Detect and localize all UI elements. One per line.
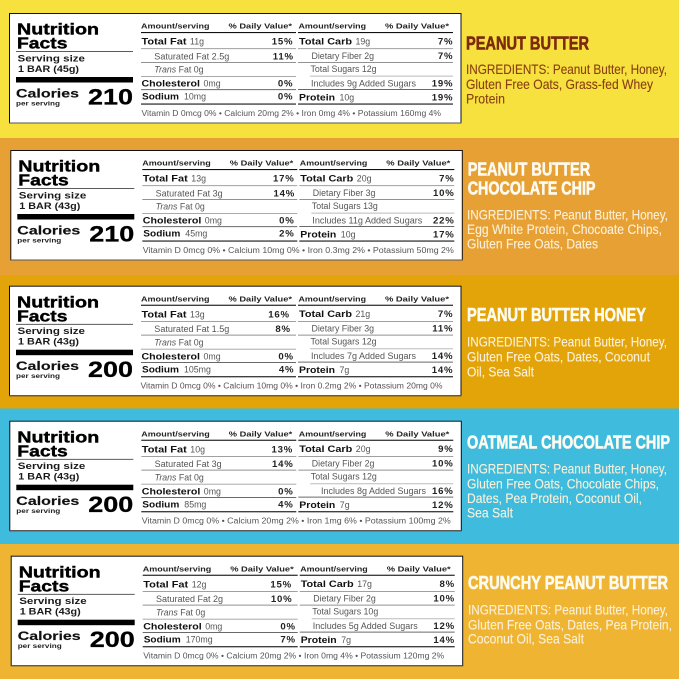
table: fat, cholesterol, sodium: 13g — [191, 174, 206, 184]
serving size: Serving size — [18, 326, 85, 336]
table: fat, cholesterol, sodium: Saturated Fat 2.5g — [154, 51, 229, 61]
table: fat, cholesterol, sodium: 16% — [268, 309, 290, 320]
table: fat, cholesterol, sodium: 7% — [280, 634, 296, 645]
table: fat, cholesterol, sodium: 0mg — [205, 216, 222, 226]
ingredients: Peanut Butter — [466, 61, 667, 106]
ingredients: Oatmeal Chocolate Chip: Dates, Pea Protein, Coconut Oil, — [467, 490, 642, 506]
table: fat, cholesterol, sodium: 4% — [279, 364, 294, 375]
table: carbs, sugars, protein: Dietary Fiber 2g — [312, 51, 374, 61]
table: fat, cholesterol, sodium: 14% — [273, 188, 295, 199]
calories: Calories — [16, 86, 79, 100]
flavor heading: Peanut Butter Chocolate Chip — [468, 159, 596, 198]
table: carbs, sugars, protein: Protein — [299, 500, 335, 510]
ingredients: Peanut Butter Honey — [467, 334, 667, 379]
calories — [18, 627, 135, 652]
table: fat, cholesterol, sodium: Saturated Fat 3g — [155, 459, 222, 469]
table: fat, cholesterol, sodium: Sodium — [144, 634, 181, 644]
heading: Nutrition Facts: Facts — [17, 443, 68, 460]
table: fat, cholesterol, sodium: Trans Fat 0g — [154, 337, 204, 347]
calories — [16, 492, 133, 517]
table: fat, cholesterol, sodium — [141, 429, 296, 512]
serving size: 1 BAR (45g) — [18, 64, 79, 74]
table: fat, cholesterol, sodium: 0% — [280, 621, 296, 632]
panel: oatmeal chocolate chip nutrition facts — [9, 421, 462, 531]
table: fat, cholesterol, sodium: 10g — [190, 444, 205, 454]
table: carbs, sugars, protein: Protein — [299, 365, 335, 375]
heading: Nutrition Facts: Nutrition — [19, 564, 101, 581]
heading: Nutrition Facts: Facts — [19, 578, 69, 595]
table: fat, cholesterol, sodium: 8% — [275, 324, 291, 335]
table: carbs, sugars, protein — [298, 22, 453, 105]
table: fat, cholesterol, sodium: 0mg — [204, 79, 221, 89]
table: carbs, sugars, protein: Dietary Fiber 2g — [312, 459, 374, 469]
table: fat, cholesterol, sodium: Total Fat — [142, 444, 187, 454]
table: carbs, sugars, protein: Includes 9g Added Sugars — [311, 78, 417, 88]
table: carbs, sugars, protein: Amount/serving — [298, 22, 366, 31]
table: carbs, sugars, protein: 19% — [432, 92, 453, 103]
table: carbs, sugars, protein: Amount/serving — [300, 564, 368, 573]
table: fat, cholesterol, sodium: 0mg — [205, 621, 222, 631]
calories: per serving — [16, 102, 60, 108]
table: fat, cholesterol, sodium: 2% — [279, 229, 295, 240]
table: fat, cholesterol, sodium: 10% — [271, 594, 293, 605]
table: carbs, sugars, protein: 7% — [438, 36, 453, 47]
serving size: Serving size — [18, 54, 85, 64]
serving size — [17, 188, 134, 220]
calories — [16, 357, 133, 382]
serving size: 1 BAR (43g) — [18, 472, 79, 482]
table: carbs, sugars, protein: 7% — [438, 309, 453, 320]
heading: Nutrition Facts: Facts — [17, 308, 68, 325]
calories — [17, 222, 134, 246]
ingredients: Crunchy Peanut Butter: Coconut Oil, Sea Salt — [468, 630, 584, 646]
table: carbs, sugars, protein: 14% — [432, 365, 453, 376]
ingredients: Peanut Butter: Protein — [466, 90, 505, 106]
table: carbs, sugars, protein: 7% — [438, 51, 453, 62]
table: fat, cholesterol, sodium: Cholesterol — [143, 216, 201, 226]
flavor heading: Peanut Butter Chocolate Chip: CHOCOLATE CHIP — [468, 177, 596, 198]
table: carbs, sugars, protein: Protein — [300, 229, 336, 239]
flavor heading: Peanut Butter: PEANUT BUTTER — [466, 32, 589, 53]
serving size: 1 BAR (43g) — [19, 201, 80, 211]
heading: Nutrition Facts: Nutrition — [17, 429, 99, 446]
calories: Calories — [18, 629, 81, 643]
calories: Calories — [16, 494, 80, 508]
vitamins and minerals line: Vitamin D 0mcg 0% • Calcium 10mg 0% • Iron 0.2mg 2% • Potassium 20mg 0% — [140, 382, 442, 391]
ingredients: Peanut Butter Chocolate Chip — [467, 206, 668, 251]
ingredients: Peanut Butter: Gluten Free Oats, Grass-fed Whey — [466, 76, 653, 92]
table: carbs, sugars, protein: 7g — [341, 635, 351, 645]
table: fat, cholesterol, sodium — [143, 564, 298, 647]
table: fat, cholesterol, sodium: Total Fat — [143, 174, 188, 184]
serving size: Serving size — [18, 461, 85, 471]
table: fat, cholesterol, sodium: Cholesterol — [142, 486, 200, 496]
table: fat, cholesterol, sodium: Sodium — [142, 92, 179, 102]
table: carbs, sugars, protein — [299, 159, 455, 242]
table: fat, cholesterol, sodium: 11% — [273, 51, 294, 62]
calories: per serving — [16, 374, 60, 380]
table: fat, cholesterol, sodium: Total Fat — [142, 309, 186, 319]
flavor heading: Peanut Butter Chocolate Chip: PEANUT BUTTER — [468, 159, 590, 180]
table: carbs, sugars, protein — [300, 564, 455, 647]
table: fat, cholesterol, sodium: % Daily Value* — [230, 564, 294, 573]
table: fat, cholesterol, sodium: Sodium — [142, 499, 179, 509]
table: carbs, sugars, protein: % Daily Value* — [385, 22, 449, 31]
table: carbs, sugars, protein: 7g — [340, 500, 350, 510]
table: fat, cholesterol, sodium — [141, 294, 296, 377]
calories: per serving — [16, 509, 61, 515]
table: fat, cholesterol, sodium — [142, 159, 297, 242]
table: fat, cholesterol, sodium: 0% — [279, 216, 295, 227]
heading: Nutrition Facts: Nutrition — [17, 22, 99, 39]
heading: Nutrition Facts — [17, 294, 99, 325]
heading: Nutrition Facts: Facts — [17, 36, 68, 53]
table: fat, cholesterol, sodium: 15% — [270, 579, 292, 590]
table: fat, cholesterol, sodium: Amount/serving — [141, 429, 210, 438]
table: carbs, sugars, protein: Total Carb — [299, 309, 353, 319]
calories: 200 — [90, 627, 135, 652]
table: fat, cholesterol, sodium: Saturated Fat 2g — [156, 594, 223, 604]
table: carbs, sugars, protein: Amount/serving — [299, 429, 366, 438]
table: fat, cholesterol, sodium: Total Fat — [143, 579, 188, 589]
table: carbs, sugars, protein: 20g — [356, 444, 371, 454]
table: fat, cholesterol, sodium: 0% — [278, 92, 293, 103]
table: fat, cholesterol, sodium: 0% — [278, 351, 294, 362]
ingredients: Peanut Butter Chocolate Chip: Gluten Free Oats, Dates — [467, 235, 598, 251]
table: fat, cholesterol, sodium: 45mg — [185, 229, 207, 239]
table: carbs, sugars, protein: Total Carb — [301, 579, 354, 589]
calories: 210 — [89, 222, 134, 246]
calories: 210 — [88, 84, 133, 110]
vitamins and minerals line: Vitamin D 0mcg 0% • Calcium 20mg 2% • Iron 0mg 4% • Potassium 160mg 4% — [142, 109, 441, 118]
calories — [16, 84, 133, 110]
ingredients: Crunchy Peanut Butter — [468, 601, 672, 646]
table: fat, cholesterol, sodium: Amount/serving — [142, 159, 211, 168]
table: fat, cholesterol, sodium: Trans Fat 0g — [154, 65, 204, 75]
table: fat, cholesterol, sodium: Sodium — [143, 229, 180, 239]
table: fat, cholesterol, sodium: % Daily Value* — [229, 429, 293, 438]
table: fat, cholesterol, sodium — [141, 22, 296, 105]
table: fat, cholesterol, sodium: Cholesterol — [142, 79, 200, 89]
table: carbs, sugars, protein: 12% — [432, 500, 454, 511]
serving size: Serving size — [19, 190, 86, 200]
heading: Nutrition Facts: Facts — [18, 173, 69, 190]
table: fat, cholesterol, sodium: Saturated Fat 1.5g — [154, 324, 229, 334]
serving size — [16, 324, 133, 355]
table: fat, cholesterol, sodium: Total Fat — [142, 37, 186, 47]
table: carbs, sugars, protein: Total Sugars 12g — [311, 472, 377, 482]
heading: Nutrition Facts: Nutrition — [17, 294, 99, 311]
table: fat, cholesterol, sodium: 17% — [273, 174, 295, 185]
table: carbs, sugars, protein: 17% — [433, 229, 455, 240]
serving size: Serving size — [19, 596, 87, 606]
serving size — [16, 51, 133, 82]
panel: peanut butter honey nutrition facts — [9, 286, 462, 396]
table: carbs, sugars, protein: Includes 8g Added Sugars — [321, 486, 427, 496]
table: carbs, sugars, protein: Total Carb — [300, 173, 354, 183]
panel: peanut butter nutrition facts — [9, 14, 462, 124]
table: fat, cholesterol, sodium: Trans Fat 0g — [156, 202, 205, 212]
vitamins and minerals line: Vitamin D 0mcg 0% • Calcium 20mg 2% • Iron 1mg 6% • Potassium 100mg 2% — [142, 517, 451, 526]
table: fat, cholesterol, sodium: 11g — [190, 37, 204, 47]
table: fat, cholesterol, sodium: Cholesterol — [142, 351, 200, 361]
table: carbs, sugars, protein: 19g — [356, 36, 370, 46]
serving size: 1 BAR (43g) — [20, 607, 81, 617]
heading: Nutrition Facts — [17, 429, 99, 460]
table: carbs, sugars, protein: 19% — [432, 78, 453, 89]
table: fat, cholesterol, sodium: 14% — [272, 459, 294, 470]
table: carbs, sugars, protein: % Daily Value* — [386, 159, 451, 168]
panel: peanut butter chocolate chip nutrition facts — [10, 150, 463, 260]
band: amber background — [0, 275, 679, 408]
table: fat, cholesterol, sodium: Amount/serving — [143, 564, 211, 573]
table: carbs, sugars, protein: 10% — [433, 188, 455, 199]
table: fat, cholesterol, sodium: 105mg — [184, 364, 211, 374]
table: carbs, sugars, protein: Dietary Fiber 2g — [313, 594, 376, 604]
table: fat, cholesterol, sodium: 0mg — [204, 486, 221, 496]
table: fat, cholesterol, sodium: % Daily Value* — [228, 294, 292, 303]
table: carbs, sugars, protein: 10g — [340, 92, 354, 102]
table: carbs, sugars, protein — [298, 429, 454, 512]
ingredients: Oatmeal Chocolate Chip: Sea Salt — [467, 504, 513, 520]
table: carbs, sugars, protein: 11% — [432, 324, 453, 335]
table: carbs, sugars, protein: 12% — [433, 621, 455, 632]
calories: Calories — [16, 359, 79, 373]
table: fat, cholesterol, sodium: Amount/serving — [141, 294, 210, 303]
table: fat, cholesterol, sodium: 170mg — [186, 634, 213, 644]
table: carbs, sugars, protein: Total Carb — [299, 444, 353, 454]
table: carbs, sugars, protein: % Daily Value* — [385, 429, 450, 438]
table: carbs, sugars, protein: 21g — [356, 309, 370, 319]
table: fat, cholesterol, sodium: 85mg — [184, 499, 206, 509]
table: carbs, sugars, protein: 9% — [438, 444, 454, 455]
table: carbs, sugars, protein: Amount/serving — [300, 159, 367, 168]
table: carbs, sugars, protein: 14% — [432, 351, 453, 362]
calories: 200 — [88, 357, 133, 382]
table: carbs, sugars, protein: 17g — [357, 579, 372, 589]
serving size — [16, 459, 133, 490]
heading: Nutrition Facts: Nutrition — [18, 159, 100, 176]
band: blue background — [0, 408, 679, 544]
table: fat, cholesterol, sodium: Sodium — [142, 364, 179, 374]
table: carbs, sugars, protein: Total Carb — [299, 36, 353, 46]
table: fat, cholesterol, sodium: % Daily Value* — [228, 22, 292, 31]
table: carbs, sugars, protein: 14% — [433, 635, 455, 646]
table: carbs, sugars, protein — [298, 294, 453, 377]
table: carbs, sugars, protein: Includes 11g Added Sugars — [312, 215, 423, 225]
serving size — [18, 594, 135, 625]
table: fat, cholesterol, sodium: 13g — [190, 309, 205, 319]
table: fat, cholesterol, sodium: 15% — [272, 37, 293, 48]
table: fat, cholesterol, sodium: Cholesterol — [143, 621, 202, 631]
table: carbs, sugars, protein: 22% — [433, 215, 455, 226]
table: carbs, sugars, protein: Dietary Fiber 3g — [313, 188, 375, 198]
table: carbs, sugars, protein: Total Sugars 12g — [310, 64, 377, 74]
table: fat, cholesterol, sodium: 12g — [192, 579, 206, 589]
table: fat, cholesterol, sodium: 4% — [278, 499, 294, 510]
band: gold background — [0, 544, 679, 679]
calories: per serving — [18, 644, 62, 650]
table: carbs, sugars, protein: Amount/serving — [298, 294, 366, 303]
table: fat, cholesterol, sodium: 0% — [278, 79, 293, 90]
table: carbs, sugars, protein: Total Sugars 13g — [312, 201, 378, 211]
heading: Nutrition Facts — [17, 22, 99, 53]
table: fat, cholesterol, sodium: 0% — [278, 486, 294, 497]
ingredients: Oatmeal Chocolate Chip — [467, 461, 667, 520]
table: carbs, sugars, protein: 20g — [357, 173, 372, 183]
calories: Calories — [17, 224, 81, 238]
heading: Nutrition Facts — [18, 159, 100, 190]
table: carbs, sugars, protein: 10g — [341, 229, 356, 239]
vitamins and minerals line: Vitamin D 0mcg 0% • Calcium 10mg 0% • Iron 0.3mg 2% • Potassium 50mg 2% — [143, 246, 454, 255]
table: carbs, sugars, protein: Protein — [301, 635, 337, 645]
table: fat, cholesterol, sodium: 0mg — [204, 351, 221, 361]
table: carbs, sugars, protein: Protein — [299, 92, 335, 102]
table: carbs, sugars, protein: Includes 5g Added Sugars — [313, 621, 418, 631]
ingredients: Peanut Butter Honey: Gluten Free Oats, Dates, Coconut — [467, 349, 650, 365]
table: carbs, sugars, protein: 10% — [433, 594, 455, 605]
band: orange background — [0, 138, 679, 275]
table: fat, cholesterol, sodium: 13% — [271, 444, 293, 455]
table: carbs, sugars, protein: Total Sugars 12g — [310, 337, 377, 347]
serving size: 1 BAR (43g) — [18, 337, 79, 347]
table: carbs, sugars, protein: 7g — [340, 365, 349, 375]
calories: per serving — [17, 238, 62, 244]
table: fat, cholesterol, sodium: Saturated Fat 3g — [156, 188, 223, 198]
band: yellow background — [0, 0, 679, 138]
heading: Nutrition Facts — [19, 564, 101, 595]
table: carbs, sugars, protein: 10% — [432, 459, 454, 470]
table: fat, cholesterol, sodium: Trans Fat 0g — [155, 472, 204, 482]
calories: 200 — [88, 492, 133, 517]
table: carbs, sugars, protein: 7% — [439, 173, 455, 184]
table: carbs, sugars, protein: % Daily Value* — [387, 564, 451, 573]
table: fat, cholesterol, sodium: Trans Fat 0g — [156, 607, 205, 617]
table: carbs, sugars, protein: Dietary Fiber 3g — [312, 324, 374, 334]
ingredients: Peanut Butter Honey: Oil, Sea Salt — [467, 363, 534, 379]
table: fat, cholesterol, sodium: Amount/serving — [141, 22, 210, 31]
table: carbs, sugars, protein: Includes 7g Added Sugars — [311, 351, 417, 361]
table: fat, cholesterol, sodium: 10mg — [184, 92, 206, 102]
table: carbs, sugars, protein: 8% — [440, 579, 455, 590]
panel: crunchy peanut butter nutrition facts — [11, 556, 463, 666]
table: carbs, sugars, protein: Total Sugars 10g — [312, 607, 378, 617]
table: carbs, sugars, protein: % Daily Value* — [385, 294, 449, 303]
vitamins and minerals line: Vitamin D 0mcg 0% • Calcium 20mg 2% • Iron 0mg 4% • Potassium 120mg 2% — [143, 652, 444, 661]
table: carbs, sugars, protein: 16% — [432, 486, 454, 497]
table: fat, cholesterol, sodium: % Daily Value* — [230, 159, 294, 168]
